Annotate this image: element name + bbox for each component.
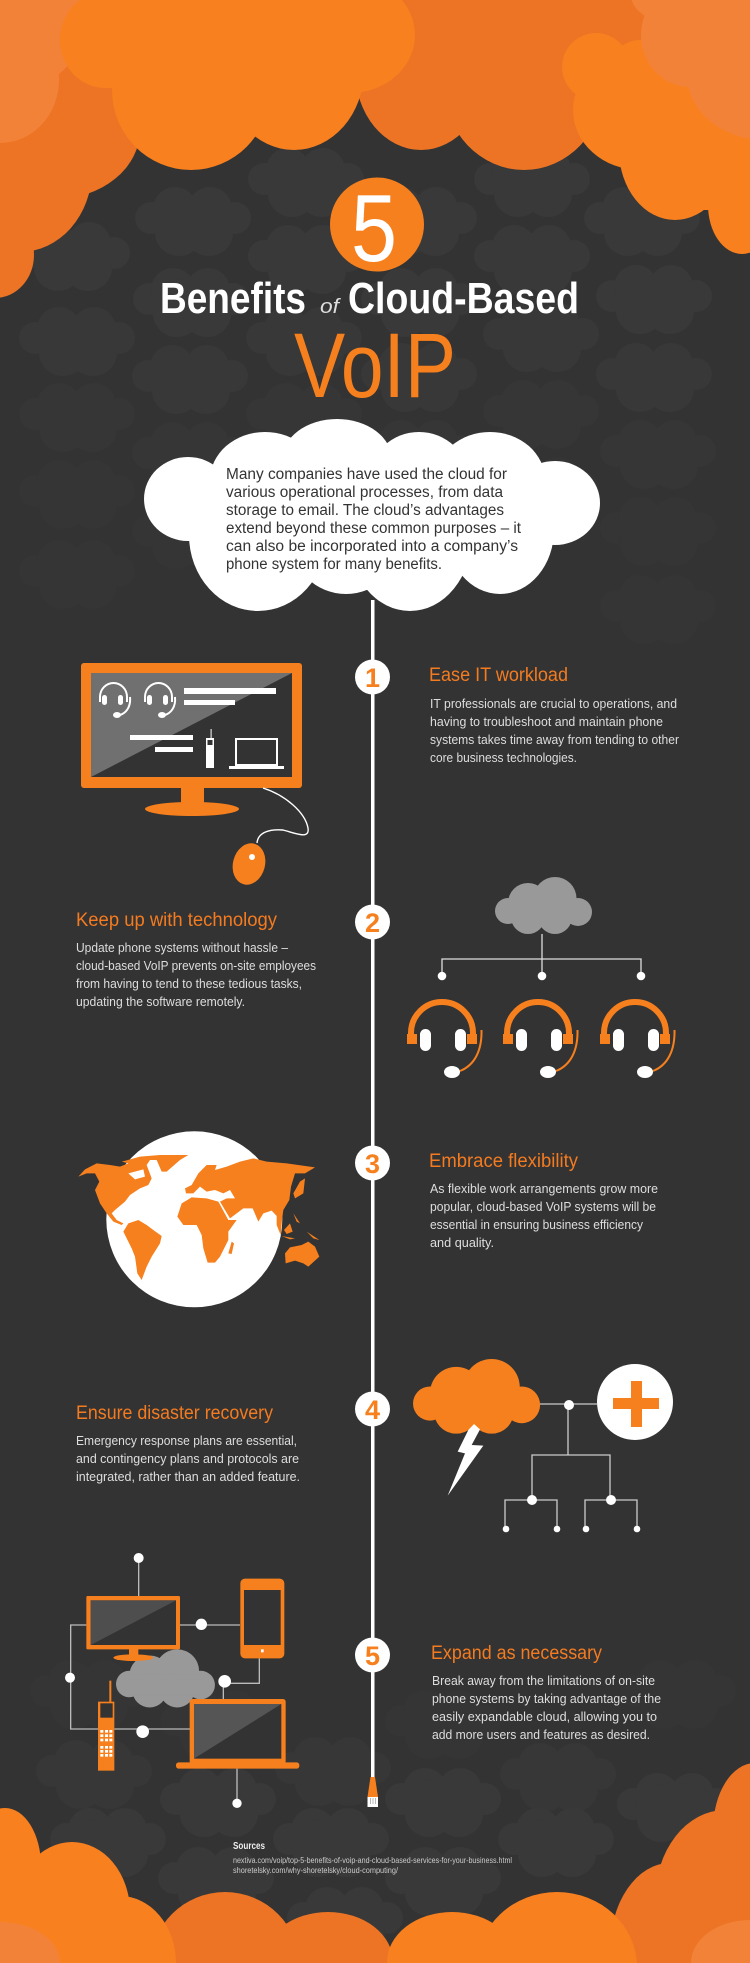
sources: nextiva.com/voip/top-5-benefits-of-voip-and-cloud-based-services-for-your-business.html [233, 1856, 512, 1865]
text block 2: Update phone systems without hassle – [76, 940, 289, 955]
icon: cloud connected to three headsets [407, 877, 675, 1078]
text block 2: cloud-based VoIP prevents on-site employees [76, 958, 316, 973]
text block 5: add more users and features as desired. [432, 1727, 650, 1742]
marker 5: 5 [365, 1641, 380, 1671]
sources [233, 1841, 512, 1875]
marker 4 [355, 1392, 390, 1426]
desktop monitor [86, 1596, 180, 1661]
bottom clouds [0, 1763, 750, 1963]
text block 5: easily expandable cloud, allowing you to [432, 1709, 657, 1724]
text block 2: from having to tend to these tedious tasks, [76, 976, 302, 991]
badge: number 5: 5 [351, 175, 397, 282]
timeline line [371, 600, 374, 1780]
text block 5 [431, 1643, 661, 1742]
intro cloud with text: phone system for many benefits. [226, 556, 442, 573]
badge: number 5 [330, 175, 424, 282]
marker 3 [355, 1146, 390, 1180]
intro cloud with text: storage to email. The cloud’s advantages [226, 502, 504, 519]
orange cloud [413, 1359, 540, 1434]
text block 5: Break away from the limitations of on-site [432, 1673, 655, 1688]
marker 2 [355, 904, 390, 940]
lightning bolt [448, 1424, 483, 1496]
text block 1 [429, 665, 680, 765]
marker 1: 1 [365, 663, 380, 693]
text block 1: core business technologies. [430, 750, 577, 765]
text block 4: Ensure disaster recovery [76, 1403, 273, 1424]
text block 3: Embrace flexibility [429, 1151, 578, 1172]
grey cloud [495, 877, 592, 934]
grey cloud [116, 1649, 215, 1707]
intro cloud with text: can also be incorporated into a company’s [226, 538, 518, 555]
text block 3: essential in ensuring business efficiency [430, 1217, 643, 1232]
cell phone [98, 1681, 114, 1771]
text block 4: Emergency response plans are essential, [76, 1433, 297, 1448]
marker 1 [355, 660, 390, 694]
text block 1: systems takes time away from tending to other [430, 732, 680, 747]
icon: cable plug [368, 1777, 378, 1807]
intro cloud with text: Many companies have used the cloud for [226, 466, 507, 483]
intro cloud with text: various operational processes, from data [226, 484, 503, 501]
text block 3: popular, cloud-based VoIP systems will be [430, 1199, 656, 1214]
text block 5: phone systems by taking advantage of the [432, 1691, 661, 1706]
text block 3: As flexible work arrangements grow more [430, 1181, 658, 1196]
sources: Sources [233, 1841, 265, 1852]
title: Benefits [160, 274, 306, 323]
marker 3: 3 [365, 1149, 380, 1179]
text block 1: having to troubleshoot and maintain phone [430, 714, 663, 729]
text block 2: Keep up with technology [76, 910, 277, 931]
headsets [407, 1002, 675, 1078]
icon: connected devices network [65, 1553, 299, 1808]
title: VoIP [294, 315, 456, 417]
plus circle [597, 1364, 673, 1440]
title [160, 274, 579, 417]
faint cloud pattern: bottom [30, 1660, 736, 1956]
sources: shoretelsky.com/why-shoretelsky/cloud-computing/ [233, 1866, 399, 1875]
marker 2: 2 [365, 908, 380, 938]
text block 4: integrated, rather than an added feature. [76, 1469, 300, 1484]
smartphone [240, 1579, 284, 1658]
text block 4: and contingency plans and protocols are [76, 1451, 299, 1466]
title: Cloud-Based [348, 274, 579, 323]
intro cloud with text: extend beyond these common purposes – it [226, 520, 522, 537]
text block 1: IT professionals are crucial to operations, and [430, 696, 677, 711]
text block 3 [429, 1151, 658, 1250]
text block 1: Ease IT workload [429, 665, 568, 686]
text block 5: Expand as necessary [431, 1643, 602, 1664]
icon: computer monitor with mouse [81, 663, 308, 888]
laptop [176, 1699, 299, 1769]
icon: storm cloud and recovery network [413, 1359, 673, 1532]
intro cloud with text [144, 419, 600, 611]
marker 4: 4 [365, 1395, 380, 1425]
text block 4 [76, 1403, 300, 1484]
icon: world globe [78, 1131, 319, 1307]
number markers [355, 660, 390, 1672]
text block 3: and quality. [430, 1235, 494, 1250]
text block 2 [76, 910, 316, 1009]
faint cloud pattern: top [14, 148, 716, 644]
top clouds [0, 0, 750, 298]
marker 5 [355, 1638, 390, 1672]
title: of [320, 296, 342, 318]
text block 2: updating the software remotely. [76, 994, 245, 1009]
